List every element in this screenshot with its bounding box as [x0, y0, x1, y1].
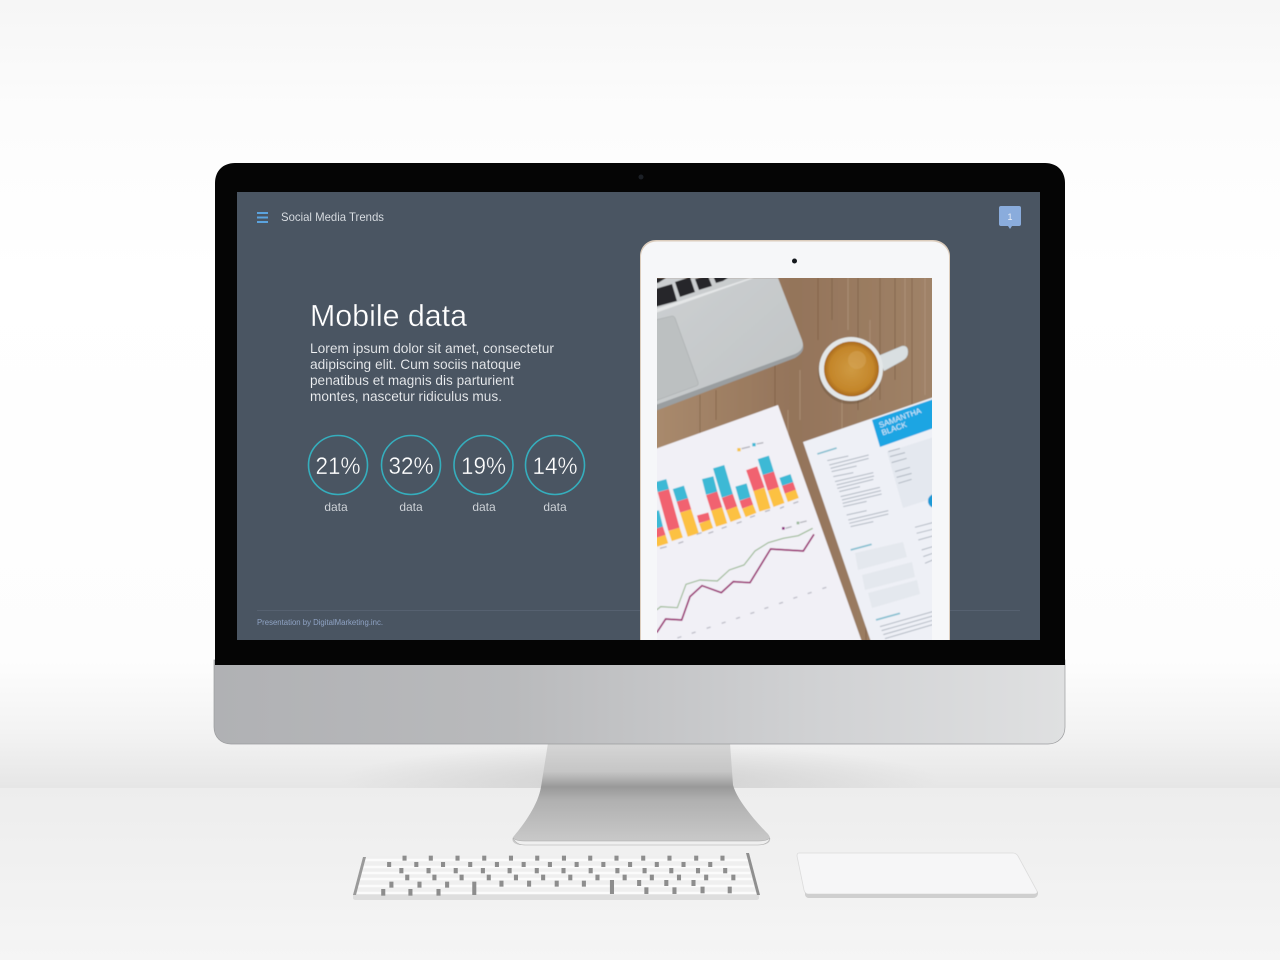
webcam: [638, 174, 644, 180]
monitor stand: [512, 743, 770, 845]
chart paper: [653, 405, 862, 642]
stat: 21%: 21%: [316, 453, 360, 480]
icon: notification badge: 1: [1007, 212, 1013, 222]
header title: Social Media Trends: [281, 210, 384, 224]
resume name banner: [872, 399, 934, 447]
screen slide: [237, 192, 1040, 640]
tablet device: [640, 240, 950, 642]
stat: 19%: 19%: [461, 453, 506, 480]
coffee cup: [818, 337, 908, 404]
trackpad: [797, 853, 1038, 898]
stat: 32%: [382, 436, 440, 514]
monitor chin: [214, 660, 1065, 744]
resume name banner: SAMANTHA: [878, 406, 923, 430]
laptop: [650, 276, 803, 413]
body text: adipiscing elit. Cum sociis natoque: [310, 356, 521, 372]
resume name banner: BLACK: [880, 420, 909, 437]
resume side panel: [887, 437, 934, 508]
stat: 14%: [526, 436, 584, 514]
body text: Lorem ipsum dolor sit amet, consectetur: [310, 340, 554, 356]
stat: 32%: 32%: [388, 453, 434, 480]
icon: notification badge: [999, 206, 1021, 229]
body text: penatibus et magnis dis parturient: [310, 372, 514, 388]
heading: Mobile data: [310, 298, 468, 333]
body text: montes, nascetur ridiculus mus.: [310, 388, 502, 404]
references blocks: [855, 542, 920, 608]
stat: 19%: data: [472, 500, 496, 514]
icon: hamburger menu: [257, 212, 268, 223]
monitor shadow on wall: [435, 757, 844, 788]
stat: 19%: [454, 436, 513, 514]
resume text lines: [817, 448, 933, 639]
key row highlights: [354, 860, 757, 893]
stat: 14%: 14%: [532, 453, 578, 480]
desk surface: [0, 788, 1280, 960]
chart legend: [737, 443, 807, 530]
keyboard keys: [657, 278, 728, 308]
stat: 21%: data: [324, 500, 348, 514]
stat: 14%: data: [543, 500, 567, 514]
tablet camera: [792, 258, 797, 264]
stat: 21%: [308, 436, 368, 514]
tablet photo: desk flat lay: [650, 276, 942, 642]
footer text: Presentation by DigitalMarketing.inc.: [257, 618, 383, 627]
stat: 32%: data: [399, 500, 423, 514]
monitor black bezel: [215, 163, 1065, 665]
trackpad: [655, 316, 698, 401]
body text: [310, 340, 554, 404]
resume paper: [803, 397, 942, 642]
keyboard: [353, 853, 760, 900]
stacked bar chart: [653, 457, 793, 545]
line chart: [657, 502, 826, 638]
keyboard key gaps: [381, 856, 735, 896]
desktop computer mockup scene: [0, 163, 1280, 900]
monitor body: [214, 163, 1065, 744]
wooden table: [655, 276, 934, 642]
